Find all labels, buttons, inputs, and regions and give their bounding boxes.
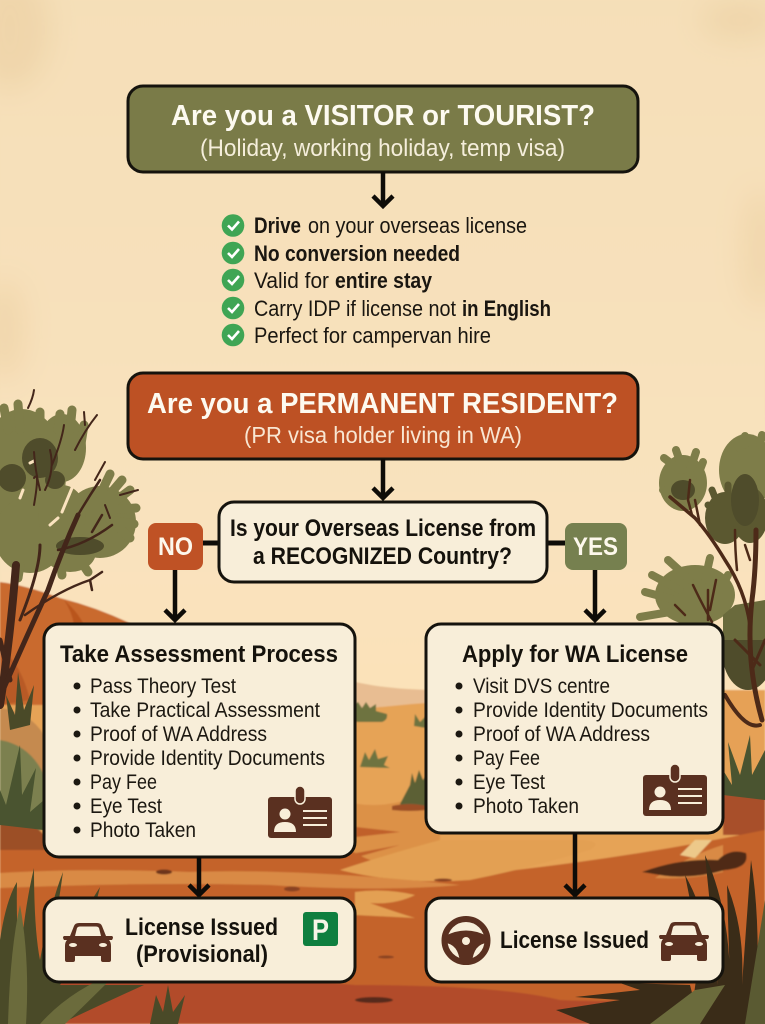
list: apply steps: Photo Taken [473,795,579,818]
icon: P plate [303,912,338,947]
heading: visitor: Are you a VISITOR or TOURIST? [171,100,595,132]
list: assessment steps: Eye Test [90,795,162,818]
panel: license issued provisional [44,898,355,982]
panel: recognized country question: a RECOGNIZED Country? [253,543,512,570]
list: assessment steps: Take Practical Assessment [90,699,320,722]
list: apply steps: Provide Identity Documents [473,699,708,722]
arrow: yes to apply [585,570,605,620]
list: assessment steps: Pay Fee [90,771,157,794]
panel: visitor question [128,86,638,172]
panel: license issued [426,898,723,982]
list: assessment steps: Proof of WA Address [90,723,267,746]
arrow: apply to issued [565,833,585,895]
list: apply steps: Eye Test [473,771,545,794]
icon: car [63,923,113,962]
badge: yes [565,523,627,570]
panel: permanent resident question [128,373,638,459]
list: assessment steps: Pass Theory Test [90,675,236,698]
item: valid: entire stay [335,268,433,293]
panel: take assessment process [44,624,355,857]
item: drive: on your overseas license [308,213,527,238]
icon: id badge [268,786,332,838]
heading: apply: Apply for WA License [462,641,688,668]
item: no conversion: No conversion needed [254,241,460,266]
arrow: no to assessment [165,570,185,620]
item: valid [222,268,433,293]
heading: permanent resident: Are you a PERMANENT RESIDENT? [147,388,618,420]
text: license issued provisional: License Issued [125,914,278,941]
panel: apply for WA license [426,624,723,833]
icon: P plate: P [312,914,329,947]
text: license issued provisional: (Provisional) [136,941,268,968]
list: assessment steps [74,675,325,842]
list: assessment steps: Provide Identity Documents [90,747,325,770]
illustration: left tree [0,390,138,830]
badge: no: NO [158,533,193,561]
text: license issued provisional [125,914,278,968]
list: apply steps [456,675,708,818]
arrow: visitor to benefits [373,172,393,206]
subheading: visitor: (Holiday, working holiday, temp visa) [200,135,565,162]
panel: recognized country question: Is your Overseas License from [230,515,536,542]
icon: car [659,922,709,961]
list: apply steps: Proof of WA Address [473,723,650,746]
illustration: bottom left plants [0,868,185,1024]
subheading: permanent resident: (PR visa holder living in WA) [244,422,522,448]
icon: steering wheel [444,919,488,962]
item: carry IDP [222,296,551,321]
panel: recognized country question [219,502,547,582]
illustration: right tree [640,434,765,800]
illustration: bottom right plants [556,855,765,1024]
arrow: resident to license question [373,459,393,498]
badge: no [148,523,203,570]
arrow: assessment to provisional [189,857,209,895]
list: apply steps: Visit DVS centre [473,675,610,698]
item: valid: Valid for [254,268,329,293]
item: carry IDP: Carry IDP if license not [254,296,456,321]
heading: assessment: Take Assessment Process [60,641,338,668]
item: drive: Drive [254,213,301,238]
badge: yes: YES [573,533,618,561]
list: assessment steps: Photo Taken [90,819,196,842]
item: carry IDP: in English [462,296,551,321]
list: apply steps: Pay Fee [473,747,540,770]
text: license issued: License Issued [500,927,649,954]
icon: id badge [643,764,707,816]
list: visitor benefits [222,213,551,348]
item: campervan: Perfect for campervan hire [254,323,491,348]
connector: no to question to yes [203,540,565,546]
item: drive [222,213,527,238]
